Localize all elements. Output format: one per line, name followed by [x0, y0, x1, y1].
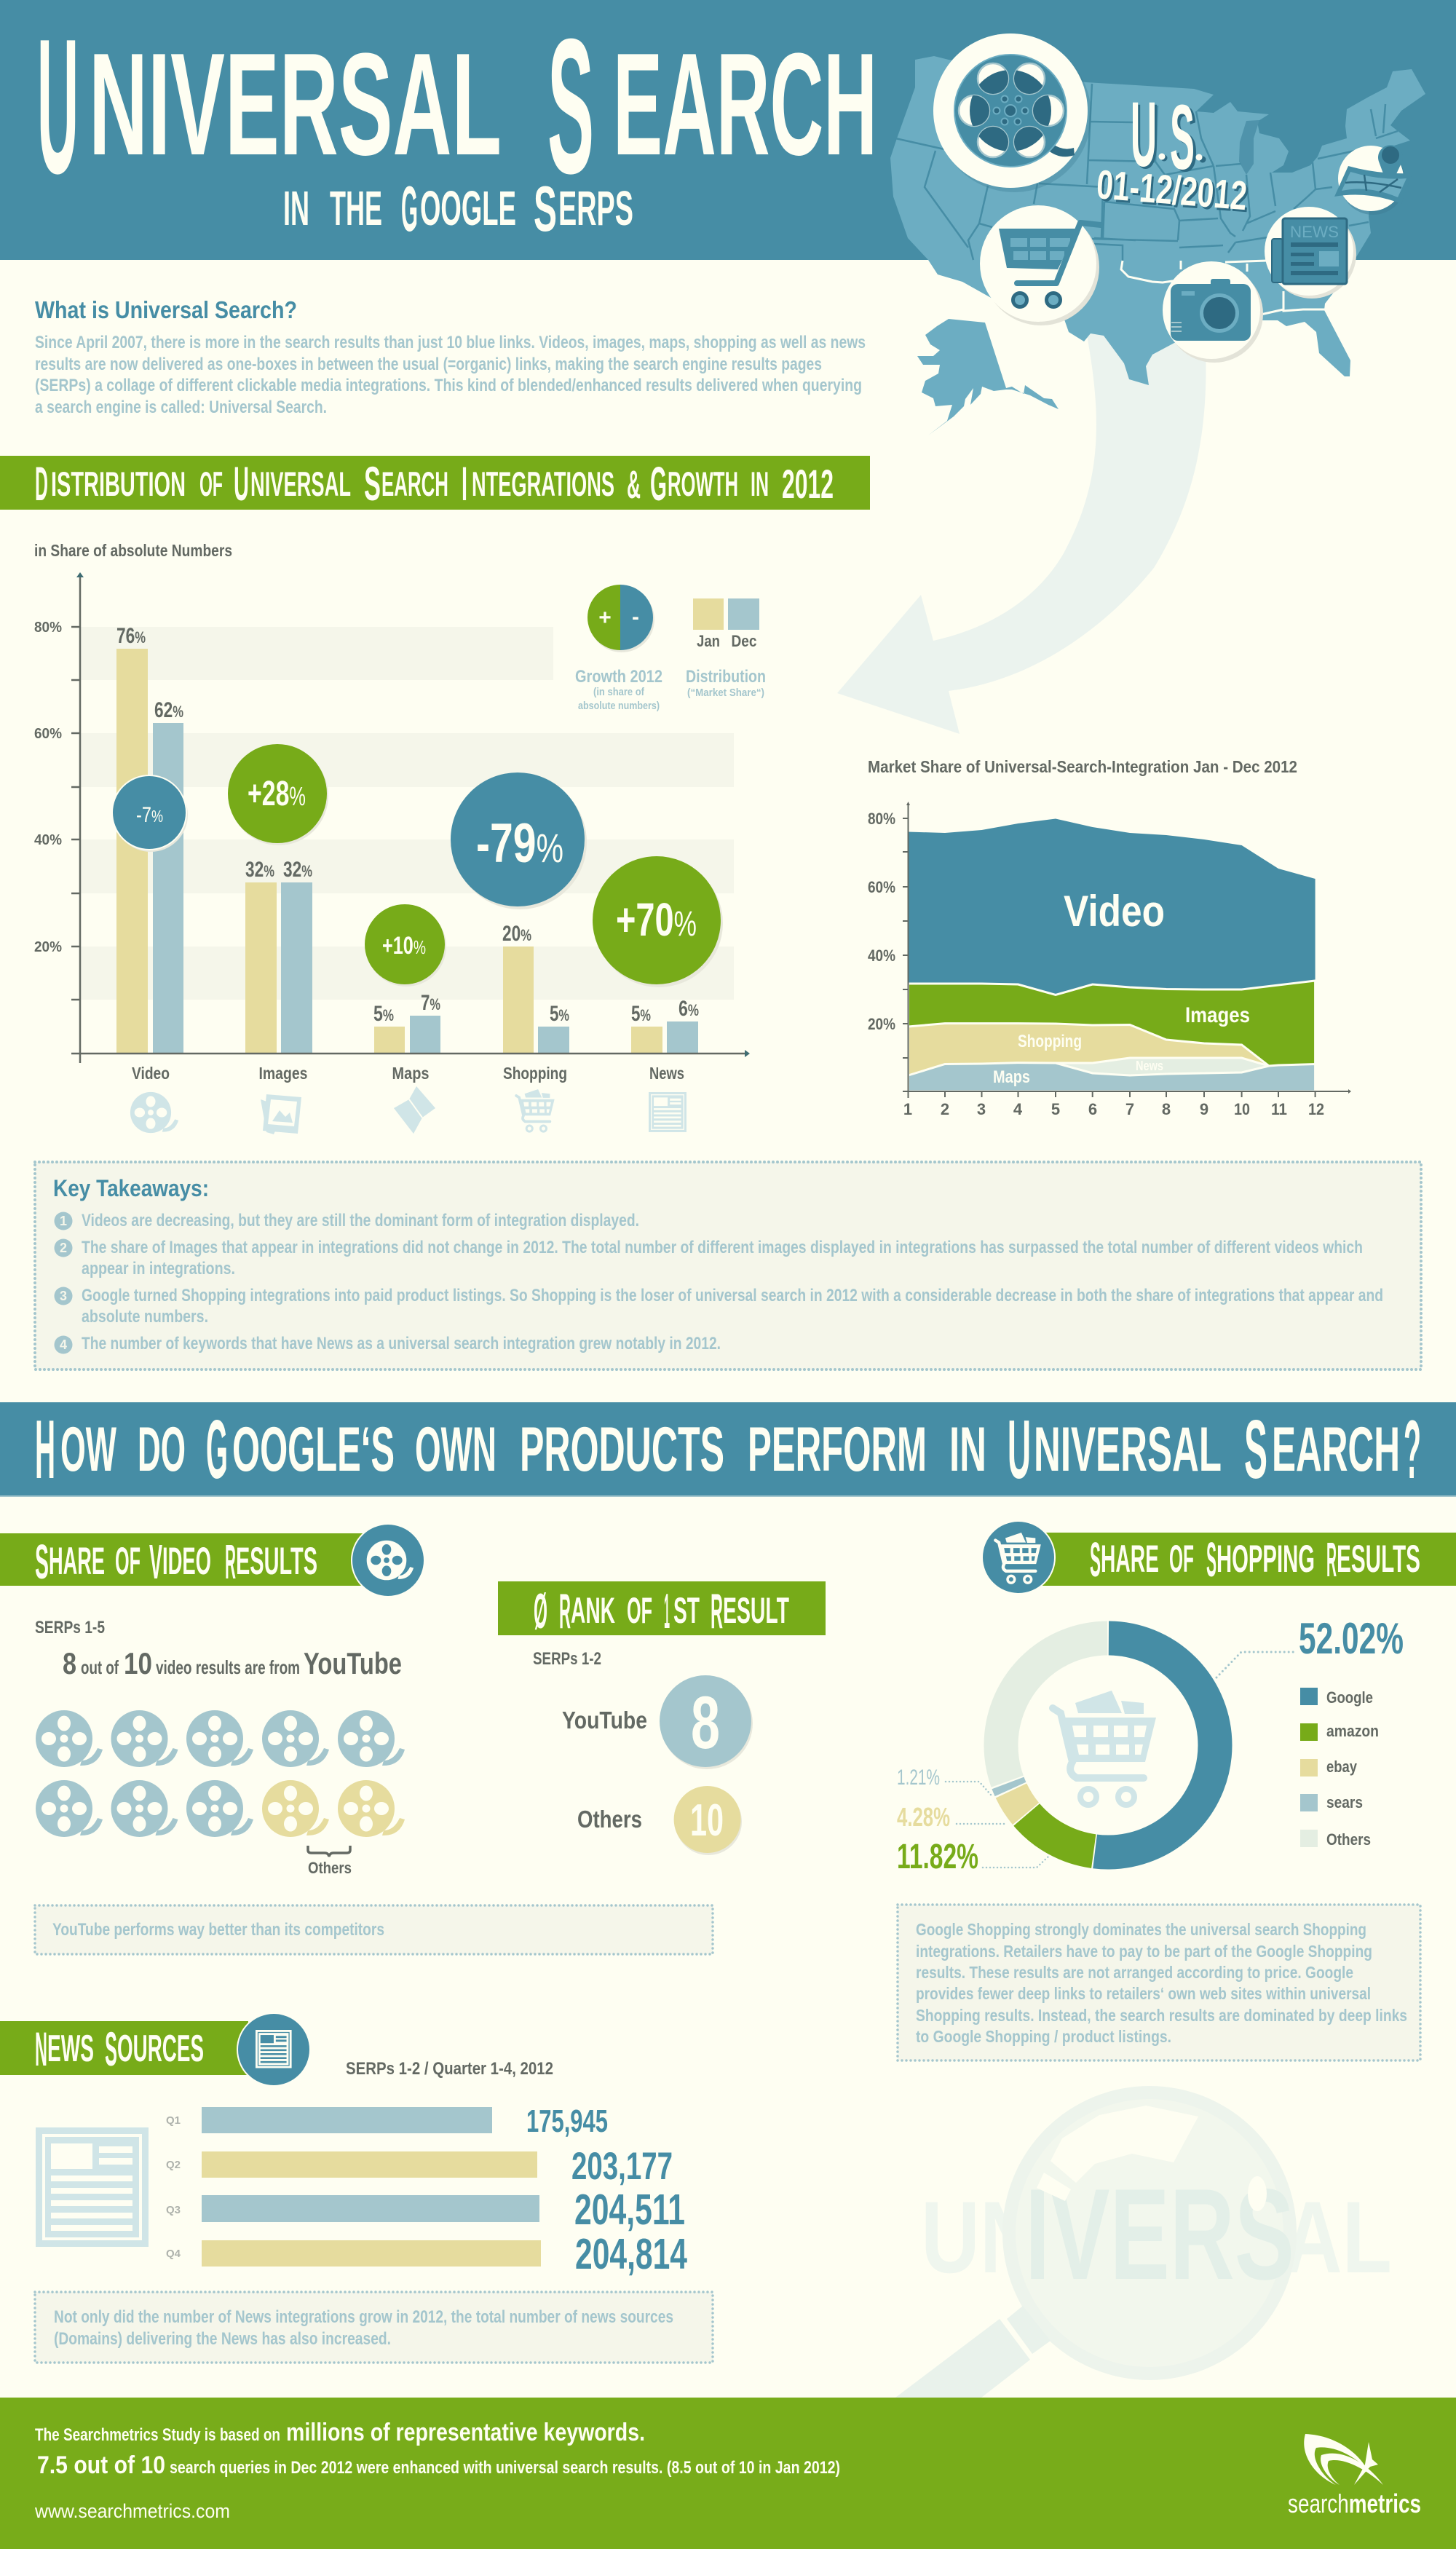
heading band — [0, 1533, 363, 1589]
area chart: market share Jan-Dec 2012: 2 — [941, 1100, 949, 1118]
subtitle: G — [401, 173, 418, 245]
map of the United States — [890, 56, 1425, 435]
intro text block — [35, 296, 866, 417]
heading band: R — [225, 1535, 236, 1589]
takeaway text — [82, 1211, 1383, 1353]
icon: maps category — [394, 1086, 435, 1134]
arrow: from map to market share chart — [837, 320, 1206, 734]
intro paragraph: Since April 2007, there is more in the search results than just 10 blue links. Videos, images, maps, shopping as well as news — [35, 333, 866, 352]
icon: camera in circle — [1163, 261, 1263, 363]
section heading: distribution: EARCH — [381, 465, 448, 503]
legend: distribution: Distribution — [686, 667, 766, 687]
bar chart: distribution and growth: 60% — [34, 726, 62, 742]
label: serps and quarters: SERPs 1-2 / Quarter 1-4, 2012 — [346, 2059, 553, 2079]
title — [37, 0, 877, 213]
callout: google shopping: Google Shopping strongly dominates the universal search Shopping — [916, 1920, 1366, 1939]
section heading: distribution: U — [234, 457, 249, 510]
footer statement: study basis — [35, 2419, 645, 2446]
area chart: market share Jan-Dec 2012: Shopping — [1018, 1032, 1082, 1051]
map: Alaska — [917, 319, 1059, 435]
section banner: google products: NIVERSAL — [1034, 1415, 1222, 1485]
callout: google shopping: results. These results are not arranged according to price. Google — [916, 1963, 1353, 1982]
area chart: market share Jan-Dec 2012: 11 — [1271, 1100, 1287, 1118]
callout: news sources: Not only did the number of News integrations grow in 2012, the total number of news sources — [54, 2307, 673, 2327]
rank: others: Others — [577, 1806, 642, 1833]
heading band: R — [711, 1584, 723, 1639]
area chart: market share Jan-Dec 2012: 60% — [868, 878, 895, 896]
growth bubble: shopping — [451, 772, 587, 909]
icon: video category — [130, 1092, 178, 1133]
heading band: IDEO — [162, 1540, 211, 1583]
category labels: Video — [132, 1064, 170, 1083]
takeaway numbers: 2 — [60, 1241, 67, 1255]
label: U.S. date range — [1095, 83, 1251, 221]
heading band: R — [1326, 1533, 1337, 1587]
section banner: google products: ? — [1404, 1404, 1421, 1496]
rank: others: 10 — [690, 1795, 724, 1846]
section banner: google products: U — [1008, 1404, 1031, 1496]
icon: shopping category — [516, 1089, 555, 1131]
section heading: distribution: S — [364, 457, 381, 510]
area chart: market share Jan-Dec 2012: 5 — [1051, 1100, 1060, 1118]
label: U.S. date range: 01-12/2012 — [1097, 163, 1251, 221]
bar chart: news sources by quarter: Q4 — [166, 2248, 181, 2260]
area chart: market share Jan-Dec 2012: 7 — [1125, 1100, 1134, 1118]
callout: news sources — [35, 2292, 713, 2363]
legend: growth — [575, 585, 662, 712]
callout: youtube — [35, 1905, 713, 1954]
area: video — [909, 818, 1315, 1091]
icon: cart badge — [981, 1520, 1056, 1594]
callout: google shopping: to Google Shopping / product listings. — [916, 2027, 1171, 2046]
area chart: market share Jan-Dec 2012: Maps — [993, 1067, 1030, 1087]
section banner: google products: DO — [138, 1415, 186, 1485]
area chart: market share Jan-Dec 2012: 40% — [868, 947, 895, 965]
bar chart: news sources by quarter: 204,814 — [575, 2230, 687, 2278]
callout: google shopping: provides fewer deep links to retailers‘ own web sites within universal — [916, 1984, 1371, 2003]
section banner: google products: IN — [949, 1415, 986, 1485]
footer url: www.searchmetrics.com — [34, 2500, 230, 2522]
takeaway numbers — [54, 1212, 73, 1354]
heading band: EWS — [47, 2028, 94, 2070]
category labels: Shopping — [503, 1064, 567, 1083]
heading band: HARE — [1101, 1538, 1159, 1581]
label: U.S. date range: S — [1170, 86, 1195, 189]
statement: 8 out of 10 from YouTube: YouTube — [304, 1646, 402, 1680]
bar chart: distribution and growth: 76% — [116, 624, 146, 648]
bar chart: distribution and growth: 5% — [631, 1002, 651, 1026]
legend: growth: - — [632, 605, 639, 629]
legend: Others — [1326, 1830, 1371, 1849]
intro paragraph: (SERPs) a collage of different clickable media integrations. This kind of blended/enhanced results delivered when querying — [35, 376, 862, 395]
callout: google shopping — [898, 1905, 1420, 2060]
area chart: market share Jan-Dec 2012: 1 — [903, 1100, 912, 1118]
section heading: distribution: NIVERSAL — [250, 465, 351, 503]
growth bubble: video — [112, 775, 188, 852]
intro heading: What is Universal Search? — [35, 296, 297, 323]
section heading: distribution: OF — [199, 465, 223, 503]
takeaways heading: Key Takeaways: — [53, 1175, 209, 1201]
area chart: market share Jan-Dec 2012: 8 — [1162, 1100, 1171, 1118]
legend — [1300, 1688, 1379, 1849]
label: serps 1-2: SERPs 1-2 — [533, 1649, 601, 1669]
logo: searchmetrics: searchmetrics — [1288, 2489, 1421, 2518]
footer — [0, 2398, 1456, 2549]
growth bubble: images: +28% — [248, 775, 306, 813]
heading band: ESULTS — [236, 1540, 317, 1583]
category labels: Images — [259, 1064, 307, 1083]
rank: others — [577, 1786, 742, 1855]
area chart: market share Jan-Dec 2012: 80% — [868, 810, 895, 828]
icon: news badge — [237, 2012, 311, 2087]
heading band: R — [559, 1584, 571, 1639]
icon: film reel in circle — [933, 33, 1091, 192]
value: Google share — [1216, 1614, 1404, 1677]
icon: map pin in circle — [1334, 145, 1412, 215]
takeaway text: Videos are decreasing, but they are still the dominant form of integration displayed. — [82, 1211, 639, 1230]
takeaway numbers: 1 — [60, 1214, 67, 1228]
title: NIVERSAL — [89, 23, 502, 186]
icon: shopping cart in circle — [980, 205, 1101, 325]
heading band: V — [149, 1535, 162, 1589]
bar chart: distribution and growth: 5% — [373, 1002, 394, 1026]
legend: sears — [1326, 1793, 1363, 1811]
callout: youtube: YouTube performs way better than its competitors — [52, 1920, 384, 1940]
area chart: market share Jan-Dec 2012: 6 — [1088, 1100, 1097, 1118]
section banner: google products: PRODUCTS — [520, 1415, 724, 1485]
map: state borders — [895, 84, 1398, 261]
label: U.S. date range: 01-12/2012 — [1095, 161, 1249, 218]
area chart: market share Jan-Dec 2012: 20% — [868, 1015, 895, 1033]
bar chart: distribution and growth — [34, 541, 766, 1134]
legend: distribution — [686, 598, 766, 699]
brace: others: Others — [308, 1859, 352, 1877]
intro paragraph: a search engine is called: Universal Search. — [35, 398, 327, 417]
heading band: Ø — [534, 1584, 547, 1639]
legend: growth: absolute numbers) — [578, 700, 660, 712]
legend: distribution: Jan — [697, 632, 720, 650]
growth bubble: maps: +10% — [382, 932, 426, 960]
section: news sources — [0, 2012, 713, 2363]
intro paragraph — [35, 333, 866, 417]
legend: growth: (in share of — [593, 686, 645, 698]
subtitle: IN — [283, 181, 309, 236]
bar chart: distribution and growth: 80% — [34, 620, 62, 636]
category labels: News — [649, 1064, 684, 1083]
area: shopping — [909, 1024, 1269, 1091]
statement: 8 out of 10 from YouTube: 8 — [63, 1646, 76, 1680]
icon: newspaper in circle — [1265, 207, 1356, 299]
footer statement: study basis: millions of representative keywords. — [286, 2419, 645, 2446]
callout: google shopping: integrations. Retailers have to pay to be part of the Google Shopping — [916, 1942, 1372, 1961]
area chart: market share Jan-Dec 2012: 3 — [977, 1100, 986, 1118]
subtitle: S — [534, 173, 557, 245]
label: serps 1-5: SERPs 1-5 — [35, 1618, 105, 1637]
legend: growth: Growth 2012 — [575, 667, 662, 687]
header banner — [0, 0, 1456, 260]
area: images — [909, 981, 1315, 1091]
growth bubble: news: +70% — [616, 893, 697, 946]
section: average rank of first result — [498, 1581, 826, 1855]
legend: distribution: (“Market Share“) — [687, 687, 764, 699]
heading band: ANK — [571, 1590, 615, 1631]
category labels: Maps — [392, 1064, 430, 1083]
statement: 8 out of 10 from YouTube — [63, 1646, 402, 1680]
bar chart: news sources by quarter: Q3 — [166, 2204, 181, 2216]
bar chart: distribution and growth: 40% — [34, 832, 62, 848]
heading band — [1042, 1533, 1456, 1587]
icon: images category — [261, 1094, 301, 1134]
area chart: market share Jan-Dec 2012: 9 — [1200, 1100, 1208, 1118]
statement: 8 out of 10 from YouTube: 10 — [124, 1646, 152, 1680]
section banner: google products: S — [1244, 1404, 1267, 1496]
heading band: OF — [115, 1540, 141, 1583]
area chart: market share Jan-Dec 2012: Images — [1185, 1003, 1250, 1027]
growth bubble: video: -7% — [136, 803, 163, 827]
takeaway numbers: 4 — [60, 1337, 67, 1352]
section banner: google products: OWN — [415, 1415, 496, 1485]
bar chart: distribution and growth: 5% — [550, 1002, 569, 1026]
value: Google share: 52.02% — [1299, 1614, 1404, 1663]
bar chart: distribution and growth: 20% — [502, 922, 531, 946]
label: U.S. date range: U — [1133, 85, 1159, 188]
section heading: distribution: 2012 — [782, 461, 834, 507]
intro paragraph: results are now delivered as one-boxes in between the usual (=organic) links, making the search engine results pages — [35, 355, 822, 374]
heading band: S — [105, 2022, 117, 2076]
icon: cart in donut — [1053, 1691, 1156, 1805]
subtitle — [283, 173, 633, 245]
growth bubble: shopping: -79% — [476, 813, 563, 874]
bar chart: news sources by quarter: 204,511 — [574, 2186, 685, 2234]
heading band: HARE — [49, 1540, 105, 1583]
bar chart: distribution and growth: 62% — [154, 698, 183, 722]
bar chart: distribution and growth: 7% — [421, 991, 440, 1015]
footer statement: queries: search queries in Dec 2012 were enhanced with universal search results. (8.5 out of 10 in Jan 2012) — [170, 2458, 840, 2478]
heading band: S — [1090, 1533, 1101, 1587]
area chart: market share Jan-Dec 2012: 12 — [1308, 1100, 1324, 1118]
chart subtitle: in Share of absolute Numbers — [34, 541, 232, 560]
takeaway text: absolute numbers. — [82, 1307, 208, 1327]
takeaway text: The number of keywords that have News as a universal search integration grew notably in 2012. — [82, 1334, 721, 1353]
bar chart: news sources by quarter: Q1 — [166, 2114, 181, 2127]
title: S — [547, 0, 594, 213]
pictogram: ten film reels — [36, 1710, 405, 1837]
section heading: distribution: IN — [751, 465, 769, 503]
statement: 8 out of 10 from YouTube: out of — [81, 1656, 119, 1678]
section: share of shopping results — [897, 1520, 1456, 2060]
section banner: google products: H — [35, 1404, 55, 1496]
area chart: market share Jan-Dec 2012 — [868, 757, 1351, 1118]
area chart: market share Jan-Dec 2012: 10 — [1234, 1100, 1250, 1118]
footer statement: queries: 7.5 out of 10 — [37, 2451, 165, 2479]
value: sears share: 1.21% — [897, 1766, 940, 1790]
section: share of video results — [0, 1523, 713, 1954]
bar chart: news sources by quarter — [166, 2103, 687, 2278]
footer statement: study basis: The Searchmetrics Study is based on — [35, 2425, 280, 2445]
subtitle: THE — [330, 181, 382, 236]
section heading: distribution: NTEGRATIONS — [472, 465, 614, 503]
brace: others — [308, 1846, 352, 1877]
panel: key takeaways — [35, 1162, 1421, 1370]
heading band: N — [35, 2022, 47, 2076]
heading band — [0, 2021, 248, 2076]
chart title: Market Share of Universal-Search-Integration Jan - Dec 2012 — [868, 757, 1297, 776]
area: maps — [909, 1063, 1315, 1091]
legend: growth: + — [598, 606, 612, 630]
heading band: ESULT — [723, 1590, 789, 1631]
section heading: distribution: ROWTH — [668, 465, 738, 503]
area: news — [1056, 1058, 1269, 1091]
section banner: google products — [0, 1402, 1456, 1497]
section heading: distribution: I — [462, 457, 467, 510]
takeaway numbers: 3 — [60, 1289, 67, 1303]
bar chart: distribution and growth: 32% — [245, 858, 274, 882]
legend: amazon — [1326, 1722, 1379, 1740]
heading band: OF — [1169, 1538, 1194, 1581]
heading band: S — [1206, 1533, 1216, 1587]
decoration: magnifier over the word universal: IVERS — [1025, 2162, 1294, 2307]
growth bubble: images — [228, 744, 328, 845]
heading band: S — [35, 1535, 49, 1589]
logo: searchmetrics — [1288, 2434, 1421, 2518]
bar chart: distribution and growth: 32% — [283, 858, 312, 882]
bar chart: distribution and growth: 6% — [678, 997, 699, 1021]
statement: 8 out of 10 from YouTube: video results are from — [156, 1656, 300, 1678]
map: gulf state borders — [1121, 261, 1325, 315]
bar chart: distribution and growth: 20% — [34, 939, 62, 955]
decoration: magnifier over the word universal — [895, 2086, 1392, 2398]
heading band: HOPPING — [1216, 1538, 1315, 1581]
area chart: market share Jan-Dec 2012: Video — [1064, 887, 1165, 936]
section heading: distribution: G — [650, 457, 667, 510]
footer statement: queries — [37, 2451, 840, 2479]
value: amazon share: 11.82% — [897, 1838, 978, 1876]
rank: youtube: 8 — [691, 1681, 720, 1764]
heading band — [498, 1581, 826, 1639]
takeaway text: appear in integrations. — [82, 1259, 235, 1279]
value: ebay share: 4.28% — [897, 1802, 950, 1832]
heading band: OF — [627, 1590, 652, 1631]
bar chart: news sources by quarter: Q2 — [166, 2159, 181, 2171]
legend: Google — [1326, 1688, 1373, 1707]
value: sears share — [897, 1766, 991, 1795]
section banner: google products: OOGLE‘S — [232, 1415, 395, 1485]
icon: news category — [649, 1092, 687, 1132]
legend: ebay — [1326, 1758, 1358, 1776]
bar chart: news sources by quarter: 203,177 — [571, 2145, 673, 2188]
title: U — [37, 0, 79, 213]
growth bubble: maps — [365, 904, 446, 987]
subtitle: OOGLE — [420, 181, 516, 236]
bar chart: news sources by quarter: 175,945 — [526, 2103, 608, 2139]
title: EARCH — [613, 23, 877, 186]
label: U.S. date range: U — [1131, 83, 1157, 186]
icon: newspaper in circle: NEWS — [1290, 223, 1339, 241]
donut chart — [1001, 1638, 1215, 1852]
section heading: distribution: & — [627, 463, 641, 507]
section banner: google products: G — [206, 1404, 228, 1496]
heading band: 1 — [664, 1584, 670, 1639]
icon: film reel badge — [351, 1523, 425, 1597]
section heading: distribution — [0, 456, 870, 510]
legend: distribution: Dec — [731, 632, 757, 650]
area chart: market share Jan-Dec 2012: 4 — [1013, 1100, 1023, 1118]
callout: news sources: (Domains) delivering the News has also increased. — [54, 2329, 391, 2349]
section heading: distribution: ISTRIBUTION — [51, 465, 186, 503]
subtitle: ERPS — [558, 181, 633, 236]
heading band: ST — [673, 1590, 700, 1631]
label: U.S. date range: S — [1173, 88, 1198, 191]
section banner: google products: OW — [60, 1415, 116, 1485]
section banner: google products: PERFORM — [748, 1415, 927, 1485]
rank: youtube: YouTube — [562, 1707, 647, 1734]
category labels — [132, 1064, 684, 1083]
icon: large newspaper — [36, 2127, 149, 2247]
area chart: market share Jan-Dec 2012: News — [1136, 1059, 1163, 1073]
heading band: OURCES — [117, 2028, 204, 2070]
section heading: distribution: D — [35, 457, 48, 510]
map: Lake Michigan — [1239, 120, 1259, 175]
rank: youtube — [562, 1675, 753, 1769]
growth bubble: news — [593, 856, 723, 987]
